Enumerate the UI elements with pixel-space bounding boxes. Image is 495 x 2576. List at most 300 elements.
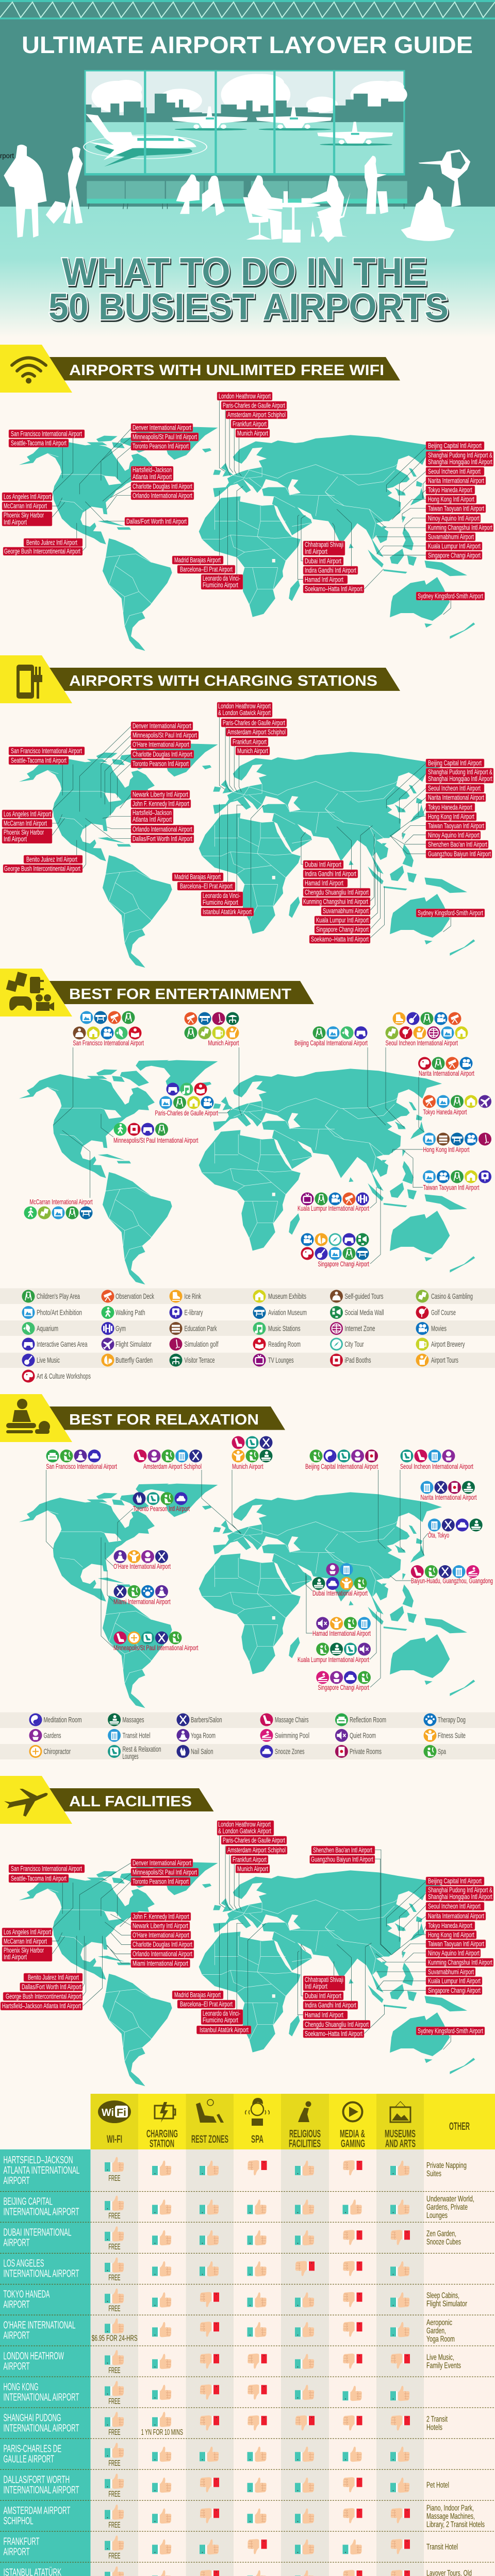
- header: museums and arts: AND ARTS: [385, 2138, 416, 2149]
- section heading: all facilities: ALL FACILITIES: [69, 1793, 192, 1810]
- legend row 3: Movies: [431, 1324, 447, 1333]
- header: rest zones: REST ZONES: [191, 2133, 228, 2145]
- label: Dallas: [125, 517, 188, 526]
- label: Shanghai: [426, 451, 493, 466]
- label: Soekarno: Soekarno–Hatta Intl Airport: [311, 936, 369, 943]
- label: Guangzhou: [310, 1855, 375, 1863]
- legend row 3: Internet Zone: [344, 1324, 375, 1333]
- label: Chhatrapati: Chhatrapati Shivaji: [305, 1976, 343, 1984]
- label: O'Hare: [131, 1931, 191, 1939]
- label: Istanbul: Istanbul Atatürk Airport: [200, 2026, 249, 2034]
- row: Hong Kong: [3, 2381, 409, 2406]
- label: Charlotte: Charlotte Douglas Intl Airport: [133, 482, 192, 490]
- label: Seattle: [9, 756, 69, 765]
- label: Hong Kong: [426, 812, 476, 821]
- airport cluster: Minneapolis: [113, 1631, 199, 1652]
- label: Phoenix: Phoenix Sky Harbor: [4, 828, 44, 836]
- legend row 2: Quiet Room: [350, 1731, 376, 1740]
- airport cluster: Munich: Munich Airport: [232, 1462, 263, 1470]
- label: Paris: [221, 401, 287, 410]
- terminal scene: [4, 70, 470, 243]
- label: George Bush: George Bush Intercontinental Airport: [6, 1993, 81, 2000]
- label: George Bush: George Bush Intercontinental Airport: [4, 547, 80, 555]
- header: religious facilities: RELIGIOUS: [289, 2128, 321, 2140]
- airport cluster: Taiwan: [423, 1171, 491, 1192]
- row: Dubai: DUBAI INTERNATIONAL: [3, 2227, 71, 2238]
- airport cluster: Minneapolis: [113, 1123, 199, 1144]
- airport cluster: Kuala Lumpur: [298, 1192, 369, 1212]
- label: Leonardo: Leonardo da Vinci-: [203, 892, 240, 900]
- legend row 3: Nail Salon: [191, 1748, 213, 1756]
- row: O'Hare: O'HARE INTERNATIONAL: [3, 2319, 75, 2331]
- label: Phoenix: Intl Airport: [4, 835, 27, 843]
- label: Munich: [236, 429, 270, 437]
- row: Beijing Capital: Underwater World,: [426, 2195, 474, 2204]
- header: rest zones: [191, 2099, 228, 2145]
- label: Leonardo: [201, 574, 243, 589]
- label: O'Hare: [131, 740, 191, 749]
- label: Hong Kong: Hong Kong Intl Airport: [428, 813, 474, 820]
- label: Singapore: [315, 925, 370, 934]
- label: Seattle: Seattle-Tacoma Intl Airport: [11, 439, 67, 447]
- label: Barcelona: [177, 2000, 235, 2008]
- row: Dallas: FREE: [108, 2490, 121, 2499]
- label: Orlando: Orlando International Airport: [133, 825, 192, 833]
- label: Chhatrapati: Chhatrapati Shivaji: [305, 541, 343, 548]
- label: Indira Gandhi: [303, 870, 358, 878]
- label: Hong Kong: Hong Kong Intl Airport: [428, 1931, 474, 1939]
- airport cluster: Seoul: [386, 1012, 468, 1047]
- legend row 3: Aquarium: [37, 1324, 58, 1333]
- header: religious facilities: [289, 2101, 321, 2149]
- row: Frankfurt: Transit Hotel: [426, 2543, 458, 2551]
- label: Minneapolis: [131, 1868, 199, 1876]
- header: spa: [245, 2098, 269, 2145]
- label: Leonardo: Fiumicino Airport: [203, 2016, 238, 2024]
- label: Singapore: Singapore Changi Airport: [316, 925, 369, 934]
- label: George Bush: [3, 547, 82, 555]
- row: Los Angeles: FREE: [108, 2274, 121, 2282]
- label: Frankfurt: Frankfurt Airport: [233, 420, 267, 428]
- airport cluster: Ota Tokyo: Ōta, Tokyo: [428, 1531, 449, 1539]
- label: Hamad: Hamad Intl Airport: [305, 2011, 343, 2019]
- row: Dubai: Zen Garden,: [426, 2229, 456, 2238]
- header: media and gaming: MEDIA &: [340, 2128, 365, 2140]
- section heading: free wifi: [0, 345, 400, 393]
- legend row 1: Ice Rink: [185, 1292, 201, 1301]
- airport cluster: Miami: Miami International Airport: [113, 1598, 171, 1606]
- airport cluster: Paris: [155, 1083, 218, 1117]
- legend row 4: Airport Brewery: [431, 1340, 465, 1349]
- row: Shanghai Pudong: FREE: [108, 2428, 121, 2437]
- label: Madrid: Madrid Barajas Airport: [174, 873, 221, 881]
- airport cluster: Paris: Paris-Charles de Gaulle Airport: [155, 1109, 218, 1117]
- label: Istanbul: Istanbul Atatürk Airport: [203, 908, 252, 916]
- label: Leonardo: [201, 892, 243, 906]
- row: Hong Kong: HONG KONG: [3, 2381, 38, 2393]
- row: Dallas: Pet Hotel: [426, 2481, 449, 2489]
- section heading: free wifi: AIRPORTS WITH UNLIMITED FREE WIFI: [69, 362, 384, 379]
- legend row 2: Swimming Pool: [275, 1731, 309, 1740]
- legend row 1: Museum Exhibits: [268, 1292, 306, 1301]
- subtitle: WHAT TO DO IN THE: [63, 251, 428, 295]
- label: Suvarnabhumi: [426, 1968, 475, 1976]
- legend row 3: [29, 1745, 446, 1761]
- label: Dallas: Dallas/Fort Worth Intl Airport: [126, 517, 187, 526]
- label: Suvarnabhumi: [426, 533, 475, 541]
- legend row 4: Interactive Games Area: [37, 1340, 88, 1349]
- window view: [84, 70, 407, 176]
- legend row 5: Visitor Terrace: [185, 1356, 214, 1365]
- row: Istanbul: [3, 2566, 477, 2576]
- header: spa: SPA: [251, 2133, 263, 2145]
- leader lines: all facilities: [52, 1835, 451, 2049]
- label: Tokyo: Tokyo Haneda Airport: [428, 1922, 472, 1929]
- airport cluster: Kuala Lumpur: [298, 1642, 371, 1664]
- row: Hong Kong: INTERNATIONAL AIRPORT: [3, 2392, 79, 2403]
- legend row 1: Self-guided Tours: [344, 1292, 384, 1301]
- label: O'Hare: O'Hare International Airport: [133, 1931, 189, 1939]
- label: Amsterdam: [226, 411, 287, 419]
- airport cluster: Narita: [421, 1481, 477, 1501]
- label: Chhatrapati: [303, 1976, 345, 1991]
- legend row 1: Observation Deck: [116, 1292, 154, 1301]
- airport cluster: Seoul: Seoul Incheon International Airport: [386, 1039, 458, 1047]
- airport cluster: Hamad: Hamad International Airport: [312, 1629, 371, 1637]
- row: Tokyo Haneda: TOKYO HANEDA: [3, 2289, 50, 2300]
- row: Tokyo Haneda: FREE: [108, 2304, 121, 2313]
- subtitle: WHAT TO DO IN THE: [62, 250, 427, 293]
- label: Madrid: [172, 556, 223, 564]
- row: Shanghai Pudong: 2 Transit: [426, 2415, 448, 2424]
- row: Hartsfield-Jackson: AIRPORT: [3, 2175, 30, 2187]
- label: Seattle: [9, 1874, 69, 1883]
- label: Toronto: Toronto Pearson Intl Airport: [133, 760, 189, 768]
- airport cluster: San Francisco: San Francisco International Airport: [73, 1039, 144, 1047]
- icon: massage: [6, 1399, 50, 1434]
- label: Guangzhou: Guangzhou Baiyun Intl Airport: [311, 1856, 373, 1863]
- label: Denver: Denver International Airport: [133, 722, 191, 730]
- label: Munich: [236, 747, 270, 755]
- row: Dallas: INTERNATIONAL AIRPORT: [3, 2484, 79, 2496]
- label: Chengdu: [303, 888, 370, 896]
- big jet: [84, 114, 207, 166]
- airport cluster: Tokyo Haneda: [423, 1095, 491, 1116]
- row: Tokyo Haneda: Flight Simulator: [426, 2300, 467, 2309]
- legend row 2: E-library: [185, 1309, 203, 1317]
- label: Charlotte: Charlotte Douglas Intl Airport: [133, 750, 192, 758]
- row: Frankfurt: FREE: [108, 2552, 121, 2561]
- legend row 2: [29, 1729, 466, 1742]
- header: wi-fi: WI-FI: [107, 2133, 122, 2145]
- airport cluster: Toronto: Toronto Pearson Intl Airport: [133, 1504, 190, 1513]
- section heading: charging stations: AIRPORTS WITH CHARGING STATIONS: [69, 673, 377, 689]
- label: Charlotte: [131, 1940, 194, 1948]
- header: charging station: STATION: [150, 2138, 174, 2149]
- section heading: entertainment: [0, 969, 314, 1016]
- label: Orlando: [131, 825, 194, 834]
- legend row 2: Golf Course: [431, 1309, 456, 1317]
- header: media and gaming: GAMING: [341, 2138, 365, 2149]
- row: O'Hare: AIRPORT: [3, 2330, 30, 2341]
- section heading: charging stations: [0, 655, 400, 703]
- label: Paris: [221, 1836, 287, 1844]
- label: Munich: Munich Airport: [237, 1865, 268, 1873]
- row: Shanghai Pudong: [3, 2412, 448, 2437]
- row: Dubai: [3, 2226, 461, 2251]
- legend row 3: Chiropractor: [43, 1748, 71, 1756]
- label: Hartsfield: [1, 2002, 82, 2010]
- label: Hartsfield: [131, 466, 173, 481]
- row: Hartsfield-Jackson: HARTSFIELD–JACKSON: [3, 2155, 73, 2166]
- row: Los Angeles: LOS ANGELES: [3, 2258, 44, 2269]
- legend row 5: Airport Tours: [431, 1356, 458, 1365]
- header: museums and arts: [385, 2102, 416, 2149]
- airport cluster: San Francisco: [73, 1011, 144, 1047]
- legend row 2: Fitness Suite: [438, 1731, 466, 1740]
- airport cluster: McCarran: McCarran International Airport: [30, 1198, 93, 1206]
- airport cluster: Singapore: Singapore Changi Airport: [318, 1260, 369, 1268]
- label: Indira Gandhi: Indira Gandhi Intl Airport: [305, 2001, 356, 2009]
- row: Los Angeles: INTERNATIONAL AIRPORT: [3, 2268, 79, 2279]
- label: Shenzhen: Shenzhen Bao'an Intl Airport: [313, 1846, 372, 1854]
- section heading: relaxation: [0, 1394, 285, 1442]
- label: Paris: Paris-Charles de Gaulle Airport: [223, 1836, 285, 1844]
- label: Leonardo: Leonardo da Vinci-: [203, 574, 240, 582]
- label: Benito Juarez: [24, 1973, 82, 1981]
- label: Los Angeles: Los Angeles Intl Airport: [4, 493, 51, 501]
- label: Suvarnabhumi: [321, 907, 370, 915]
- map labels: wifi: [2, 392, 493, 600]
- legend row 1: [22, 1290, 473, 1302]
- label: Munich: Munich Airport: [237, 747, 268, 755]
- small jets: [172, 107, 393, 146]
- row: Dallas: DALLAS/FORT WORTH: [3, 2474, 70, 2485]
- table header: [91, 2094, 495, 2149]
- label: Phoenix: [2, 1946, 52, 1961]
- label: Orlando: [131, 1950, 194, 1958]
- header: wi-fi: Fi: [117, 2107, 126, 2119]
- label: London: & London Gatwick Airport: [218, 1827, 271, 1835]
- label: Chhatrapati: [303, 541, 345, 555]
- label: Amsterdam: Amsterdam Airport Schiphol: [227, 411, 286, 418]
- label: Chhatrapati: Intl Airport: [305, 1982, 327, 1990]
- label: Phoenix: Intl Airport: [4, 518, 27, 526]
- label: Istanbul: [196, 2026, 251, 2034]
- row: Amsterdam: SCHIPHOL: [3, 2515, 33, 2527]
- label: Newark: [131, 1922, 190, 1930]
- label: Tokyo: [426, 803, 475, 811]
- label: Indira Gandhi: Indira Gandhi Intl Airport: [305, 870, 356, 878]
- label: Soekarno: [309, 935, 370, 943]
- label: San Francisco: San Francisco International Airport: [11, 747, 82, 755]
- title: ULTIMATE AIRPORT LAYOVER GUIDE: [22, 31, 473, 58]
- label: Dallas: [20, 1982, 82, 1991]
- label: JFK: [131, 800, 191, 808]
- subtitle: 50 BUSIEST AIRPORTS: [48, 286, 449, 328]
- label: Indira Gandhi: Indira Gandhi Intl Airport: [305, 567, 356, 574]
- label: Soekarno: [303, 585, 364, 593]
- label: Soekarno: Soekarno–Hatta Intl Airport: [305, 585, 362, 592]
- row: Paris: PARIS-CHARLES DE: [3, 2443, 61, 2454]
- label: London Heathrow: London Heathrow Airport: [219, 393, 271, 400]
- label: Shanghai: [426, 768, 493, 783]
- legend row 2: Transit Hotel: [123, 1731, 151, 1740]
- legend row 2: Photo/Art Exhibition: [37, 1309, 82, 1317]
- legend row 5: Live Music: [37, 1356, 60, 1365]
- label: Tokyo: [426, 486, 475, 494]
- legend row 5: TV Lounges: [268, 1356, 294, 1365]
- legend row 1: Barbers/Salon: [191, 1716, 222, 1724]
- row: London Heathrow: Family Events: [426, 2361, 461, 2370]
- label: London: London Heathrow Airport: [218, 1821, 271, 1828]
- legend row 3: Education Park: [185, 1324, 217, 1333]
- row: Dallas: [3, 2473, 449, 2499]
- label: Seattle: Seattle-Tacoma Intl Airport: [11, 756, 67, 765]
- label: Suvarnabhumi: Suvarnabhumi Airport: [323, 907, 369, 915]
- airport cluster: Hong Kong: Hong Kong Intl Airport: [423, 1145, 470, 1154]
- label: Frankfurt: Frankfurt Airport: [233, 738, 267, 746]
- label: Orlando: [131, 492, 194, 500]
- label: Minneapolis: [131, 731, 199, 739]
- header: media and gaming: [340, 2102, 365, 2149]
- label: Chengdu: Chengdu Shuangliu Intl Airport: [305, 888, 369, 896]
- label: Toronto: Toronto Pearson Intl Airport: [133, 442, 189, 450]
- airport cluster: Beijing: Beijing Capital International Airport: [294, 1039, 368, 1047]
- legend: relaxation: [0, 1713, 495, 1761]
- airport cluster: Minneapolis: Minneapolis/St Paul International Airport: [113, 1643, 199, 1652]
- label: Hamad: Hamad Intl Airport: [305, 576, 343, 583]
- silhouettes: [4, 145, 470, 243]
- label: San Francisco: [9, 747, 85, 755]
- row: Tokyo Haneda: AIRPORT: [3, 2299, 30, 2311]
- label: Hong Kong: [426, 495, 476, 503]
- label: Barcelona: [177, 565, 235, 573]
- row: Dubai: AIRPORT: [3, 2237, 30, 2248]
- label: London Heathrow and Gatwick: London Heathrow Airport: [218, 702, 271, 710]
- row: O'Hare: $6.95 FOR 24-HRS: [92, 2334, 138, 2343]
- label: Madrid: [172, 873, 223, 881]
- world map: all facilities: [19, 1862, 475, 2086]
- label: San Francisco: San Francisco International Airport: [11, 430, 82, 438]
- label: Newark: [131, 790, 190, 799]
- row: Hartsfield-Jackson: Suites: [426, 2170, 441, 2178]
- label: Benito Juarez: Benito Juárez Intl Airport: [28, 1973, 79, 1981]
- label: Leonardo: [201, 2009, 243, 2025]
- airport cluster: Toronto: [133, 1492, 190, 1513]
- label: Chhatrapati: Intl Airport: [305, 548, 327, 555]
- row: Amsterdam: AMSTERDAM AIRPORT: [3, 2505, 70, 2516]
- label: Hartsfield: Atlanta Intl Airport: [133, 473, 172, 481]
- label: Tokyo: [426, 1922, 475, 1930]
- section heading: relaxation: BEST FOR RELAXATION: [69, 1412, 259, 1428]
- row: London Heathrow: Live Music,: [426, 2353, 454, 2362]
- airport cluster: Tokyo Haneda: Tokyo Haneda Airport: [423, 1108, 467, 1116]
- label: Seattle: Seattle-Tacoma Intl Airport: [11, 1874, 67, 1883]
- row: O'Hare: Garden,: [426, 2327, 446, 2335]
- label: Orlando: Orlando International Airport: [133, 492, 192, 500]
- row: Hartsfield-Jackson: ATLANTA INTERNATIONAL: [3, 2165, 79, 2176]
- label: Orlando: Orlando International Airport: [133, 1950, 192, 1958]
- airport cluster: Baiyun-Huadu: [411, 1565, 493, 1585]
- legend row 2: Social Media Wall: [344, 1309, 384, 1317]
- row: Shanghai Pudong: SHANGHAI PUDONG: [3, 2412, 61, 2424]
- legend row 3: [22, 1322, 447, 1335]
- label: George Bush: [3, 865, 82, 873]
- row: London Heathrow: LONDON HEATHROW: [3, 2350, 64, 2362]
- legend row 3: Spa: [438, 1748, 446, 1756]
- row: Shanghai Pudong: Hotels: [426, 2423, 442, 2432]
- map labels: all facilities: [1, 1821, 493, 2038]
- airport cluster: San Francisco: [46, 1450, 117, 1470]
- airport cluster: McCarran: [24, 1198, 93, 1219]
- legend row 2: Walking Path: [116, 1309, 145, 1317]
- legend row 4: Simulation golf: [185, 1340, 219, 1349]
- label: Los Angeles: Los Angeles Intl Airport: [4, 810, 51, 818]
- label: McCarran: McCarran Intl Airport: [4, 1937, 47, 1945]
- row: Hong Kong: FREE: [108, 2397, 121, 2406]
- label: Amsterdam: Amsterdam Airport Schiphol: [227, 1846, 286, 1854]
- header: wi-fi: Wi: [102, 2107, 114, 2119]
- label: Frankfurt: [231, 738, 268, 746]
- row: Frankfurt: AIRPORT: [3, 2546, 30, 2557]
- legend row 2: Gardens: [43, 1731, 61, 1740]
- label: Frankfurt: [231, 1856, 268, 1864]
- legend row 2: Aviation Museum: [268, 1309, 307, 1317]
- leader lines: charging: [52, 717, 451, 938]
- airport cluster: Seoul: [400, 1450, 473, 1470]
- label: Madrid: Madrid Barajas Airport: [174, 556, 221, 564]
- airport cluster: Munich: [232, 1436, 272, 1470]
- legend row 5: iPad Booths: [344, 1356, 371, 1365]
- icon: dice cards beer gamepad film: [6, 972, 54, 1011]
- airport cluster: Hong Kong: [423, 1132, 491, 1154]
- label: JFK: John F. Kennedy Intl Airport: [133, 1912, 189, 1921]
- hero: airport terminal illustration: [0, 0, 495, 337]
- label: Munich: Munich Airport: [237, 430, 268, 437]
- label: San Francisco: [9, 430, 85, 438]
- table: all facilities comparison: [0, 2094, 495, 2576]
- label: Dubai: [303, 557, 343, 565]
- section heading: all facilities: [0, 1776, 213, 1824]
- label: Seattle: [9, 439, 69, 447]
- label: Barcelona: [177, 882, 235, 890]
- row: Shanghai Pudong: 1 YN FOR 10 MINS: [141, 2428, 183, 2437]
- row: O'Hare: Aeroponic: [426, 2318, 452, 2327]
- label: Dubai: Dubai Intl Airport: [305, 557, 341, 565]
- row: Frankfurt: FRANKFURT: [3, 2536, 39, 2547]
- icon: plane: [4, 1789, 48, 1817]
- row: Dubai: Snooze Cubes: [426, 2238, 461, 2246]
- roof truss: [0, 0, 495, 20]
- airport cluster: Dubai: Dubai International Airport: [312, 1589, 368, 1597]
- legend row 2: Yoga Room: [191, 1731, 216, 1740]
- label: Denver: Denver International Airport: [133, 1859, 191, 1867]
- label: London Heathrow and Gatwick: [217, 702, 272, 717]
- label: Phoenix: [2, 828, 52, 843]
- label: Amsterdam: Amsterdam Airport Schiphol: [227, 728, 286, 736]
- row: Hartsfield-Jackson: [3, 2155, 467, 2187]
- label: Dallas: Dallas/Fort Worth Intl Airport: [133, 835, 192, 843]
- header: wi-fi: [98, 2100, 131, 2145]
- label: Hong Kong: [426, 1930, 476, 1939]
- airport cluster: San Francisco: San Francisco International Airport: [46, 1462, 117, 1470]
- leader lines: wifi: [52, 400, 451, 615]
- legend row 4: City Tour: [344, 1340, 364, 1349]
- label: Madrid: Madrid Barajas Airport: [174, 1991, 221, 1999]
- map labels: charging: [2, 702, 493, 943]
- label: Barcelona: Barcelona–El Prat Airport: [180, 882, 233, 890]
